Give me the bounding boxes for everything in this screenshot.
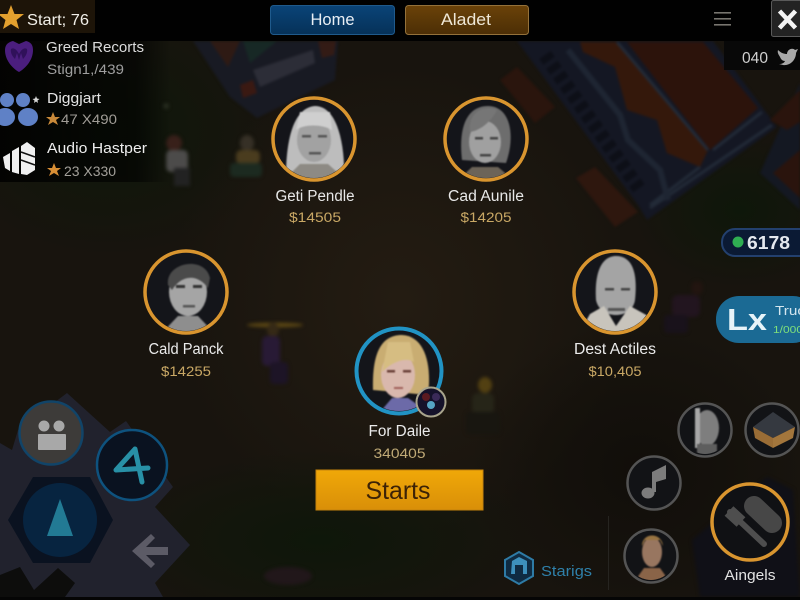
player card: Cald Panck: [145, 251, 227, 379]
button: music: [628, 456, 680, 510]
player card: For Daile (active): 340405: [374, 445, 426, 461]
top bar: [0, 0, 800, 41]
row: audio hastper: Audio Hastper: [47, 140, 147, 157]
icon: close button: [772, 0, 800, 36]
button: crate: [746, 404, 798, 456]
aladet tab: [406, 6, 528, 34]
player card: Cad Aunile: $14205: [460, 209, 512, 225]
left control cluster: [0, 393, 190, 597]
row: greed recorts: Stign1,/439: [47, 62, 124, 77]
button: angels: [712, 484, 788, 584]
player card: Geti Pendle: Geti Pendle: [276, 188, 354, 205]
player card: For Daile (active): [356, 328, 446, 461]
row: greed recorts: Greed Recorts: [46, 39, 144, 56]
building: far right: [760, 83, 800, 210]
avatar badge: [416, 388, 446, 416]
wooden steps: [500, 67, 638, 227]
starigs link: Starigs: [541, 563, 592, 580]
home tab: [270, 6, 394, 34]
leaderboard list: [0, 39, 170, 182]
level pill: Truc: [775, 304, 800, 318]
player card: Cald Panck: $14255: [161, 363, 211, 379]
level pill: 1/000: [773, 324, 800, 336]
row: diggjart: [0, 90, 117, 127]
level pill: Lx: [727, 302, 768, 337]
button: portrait blond: [624, 530, 678, 582]
currency pill: 6178: [747, 233, 790, 253]
row: audio hastper: 23 X330: [64, 164, 116, 179]
button: angels: Aingels: [724, 567, 776, 584]
building: top right: [517, 41, 777, 220]
row: greed recorts: [5, 39, 144, 77]
player card: Cad Aunile: Cad Aunile: [448, 188, 524, 205]
player card: Geti Pendle: [273, 98, 355, 225]
start button: [316, 470, 483, 510]
button: portrait man: [678, 404, 732, 456]
button: back arrow: [132, 534, 168, 568]
button: hexagon cone: [8, 477, 113, 563]
player card: For Daile (active): For Daile: [368, 423, 430, 440]
row: diggjart: Diggjart: [47, 90, 102, 107]
aladet tab: Aladet: [441, 11, 491, 29]
building: top left: [193, 41, 338, 118]
backdrop behind angels button: [692, 477, 800, 597]
level pill: [716, 296, 800, 343]
social counter: 040: [742, 50, 768, 67]
map characters: [163, 103, 703, 585]
start button: Starts: [366, 477, 430, 505]
row: diggjart: 47 X490: [61, 112, 117, 127]
currency pill: [722, 229, 800, 256]
divider: [608, 516, 609, 590]
icon: menu: [714, 12, 731, 26]
home tab: Home: [310, 11, 354, 29]
player card: Geti Pendle: $14505: [289, 209, 341, 225]
bottom edge: [0, 597, 800, 600]
player card: Dest Actiles: [574, 251, 656, 379]
button: group: [20, 402, 82, 464]
player card: Dest Actiles: Dest Actiles: [574, 341, 656, 358]
icon: bird: [778, 49, 798, 65]
player card: Dest Actiles: $10,405: [588, 363, 642, 379]
player card: Cald Panck: Cald Panck: [148, 341, 224, 358]
hexagon panel backdrop: [0, 393, 190, 597]
right action buttons: [608, 404, 800, 597]
star counter: Start; 76: [27, 12, 89, 29]
star counter: [0, 0, 95, 33]
button: number four: [97, 430, 167, 500]
social counter: [724, 41, 800, 70]
row: audio hastper: [3, 140, 147, 179]
starigs link: [505, 552, 592, 584]
player card: Cad Aunile: [445, 98, 527, 225]
